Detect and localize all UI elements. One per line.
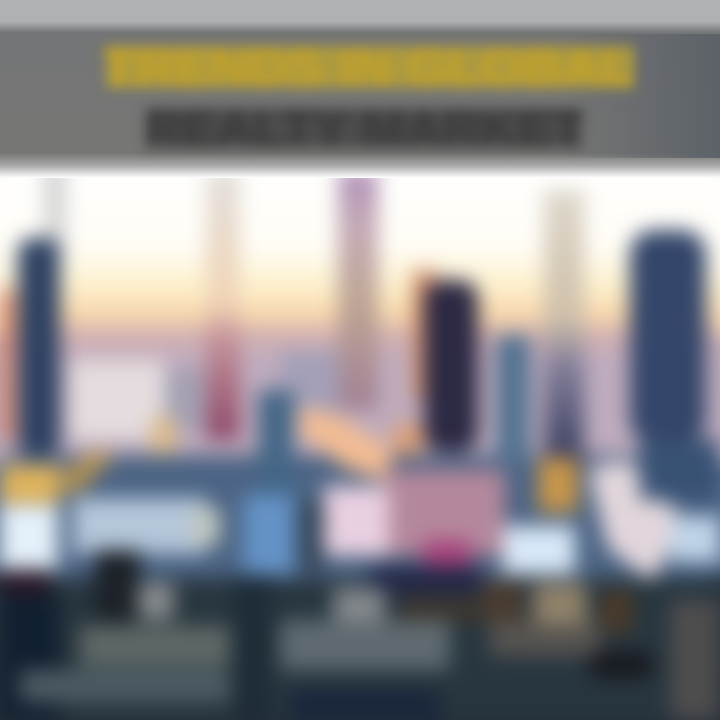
towers [0,160,706,500]
heading line 1 backing [106,46,634,88]
title band [0,0,720,178]
band right shading [560,34,720,158]
heading line 1: TRENDS IN GLOBAL [103,39,633,97]
distant city haze [0,330,720,580]
band background [0,0,720,178]
midground blocks [0,408,720,582]
foreground dark buildings [0,550,720,720]
sky [0,150,720,340]
heading line 2 backing [146,108,582,148]
heading text [103,39,634,157]
photo: city skyline background [0,150,720,720]
heading line 2: REALTY MARKET [144,101,584,157]
